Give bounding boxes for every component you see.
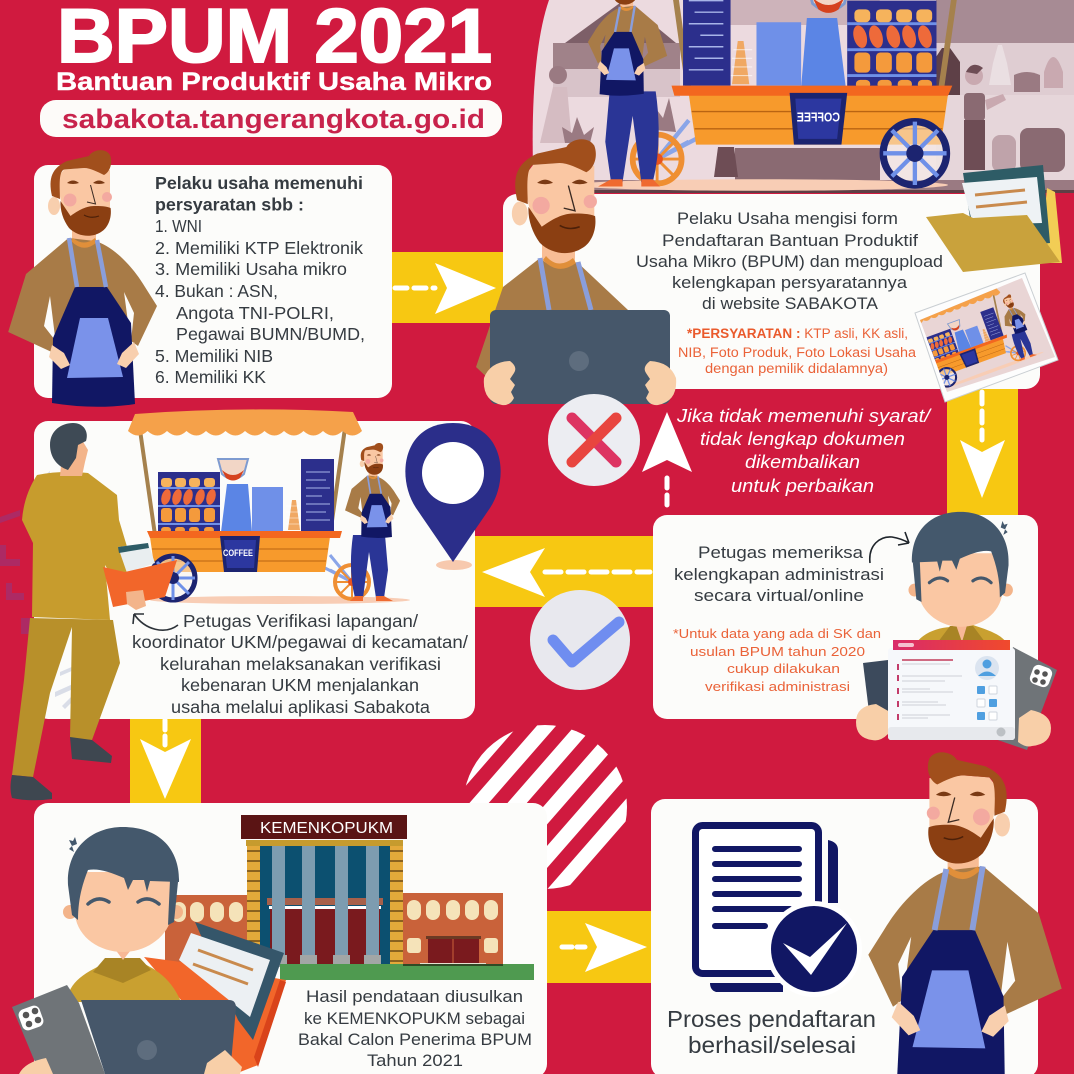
arrow bar: step 2 to 3 xyxy=(947,386,1018,516)
registration text: Pendaftaran Bantuan Produktif xyxy=(662,232,918,250)
panel: field verification xyxy=(34,409,475,719)
requirements note: dengan pemilik didalamnya) xyxy=(705,361,888,376)
verification text: koordinator UKM/pegawai di kecamatan/ xyxy=(132,632,468,652)
arrow bar: step 4 to 5 xyxy=(130,718,201,804)
check text: Petugas memeriksa xyxy=(698,543,864,562)
website pill xyxy=(40,100,502,137)
icon: approved xyxy=(530,590,630,690)
illustration: ministry building xyxy=(165,815,534,980)
requirements text: Pegawai BUMN/BUMD, xyxy=(176,324,365,344)
figure: officer with form xyxy=(856,512,1057,750)
figure: entrepreneur xyxy=(868,752,1062,1074)
icon: folder xyxy=(926,165,1062,272)
completion text: Proses pendaftaran xyxy=(667,1006,876,1032)
panel: eligibility requirements xyxy=(8,150,392,407)
figure: entrepreneur with laptop xyxy=(476,139,676,405)
requirements note: *PERSYARATAN : KTP asli, KK asli, xyxy=(687,326,908,341)
requirements note: NIB, Foto Produk, Foto Lokasi Usaha xyxy=(678,345,917,360)
arrow: curved to officer xyxy=(870,532,909,563)
note xyxy=(673,626,881,694)
note: usulan BPUM tahun 2020 xyxy=(690,644,865,659)
figure: entrepreneur xyxy=(8,150,157,407)
figure: field officer xyxy=(10,423,177,800)
panel: administrative check xyxy=(653,512,1057,750)
return note: tidak lengkap dokumen xyxy=(700,429,905,449)
return note: Jika tidak memenuhi syarat/ xyxy=(676,406,932,426)
requirements text: 5. Memiliki NIB xyxy=(155,346,273,366)
verification text: Petugas Verifikasi lapangan/ xyxy=(183,611,418,631)
proposal text: Bakal Calon Penerima BPUM xyxy=(298,1031,532,1049)
proposal text: Tahun 2021 xyxy=(367,1052,463,1070)
illustration: coffee cart: COFFEE xyxy=(223,548,253,558)
arrow: curved to officer xyxy=(133,614,178,630)
figure: officer with tablet xyxy=(12,827,286,1074)
note: verifikasi administrasi xyxy=(705,679,850,694)
registration text: di website SABAKOTA xyxy=(702,295,878,313)
requirements text: persyaratan sbb : xyxy=(155,194,304,214)
verification text: kebenaran UKM menjalankan xyxy=(181,675,419,695)
requirements text: 1. WNI xyxy=(155,216,202,236)
requirements text: 6. Memiliki KK xyxy=(155,367,266,387)
icon: location pin xyxy=(405,423,501,570)
registration text: Usaha Mikro (BPUM) dan mengupload xyxy=(636,253,943,271)
icon: rejected xyxy=(548,394,640,486)
requirements text xyxy=(155,173,365,387)
arrow bar: step 5 to 6 xyxy=(546,911,652,983)
market illustration xyxy=(530,0,1074,193)
decorative faint marks on left edge xyxy=(0,510,32,634)
check text: secara virtual/online xyxy=(694,586,864,605)
panel: proposal to ministry xyxy=(12,803,547,1074)
cart mirrored xyxy=(574,0,980,191)
illustration: ministry building: KEMENKOPUKM xyxy=(260,820,393,837)
return note: untuk perbaikan xyxy=(731,476,874,496)
arrow bar: step 1 to 2 xyxy=(392,252,504,323)
registration text: kelengkapan persyaratannya xyxy=(672,274,908,292)
note: *Untuk data yang ada di SK dan xyxy=(673,626,881,641)
requirements text: 4. Bukan : ASN, xyxy=(155,281,278,301)
verification text: usaha melalui aplikasi Sabakota xyxy=(171,697,430,717)
registration text: Pelaku Usaha mengisi form xyxy=(677,210,898,228)
verification text: kelurahan melaksanakan verifikasi xyxy=(160,654,441,674)
arrow: back up xyxy=(642,412,692,510)
completion text: berhasil/selesai xyxy=(688,1032,856,1058)
photo of business xyxy=(905,270,1060,402)
striped circle decoration xyxy=(466,725,627,889)
verification text xyxy=(132,611,468,717)
panel: registration complete xyxy=(651,752,1062,1074)
arrow bar: step 3 to 4 xyxy=(474,536,654,607)
requirements note xyxy=(678,326,917,376)
illustration: coffee cart xyxy=(128,409,410,604)
check text xyxy=(674,543,884,605)
return note: dikembalikan xyxy=(745,452,860,472)
return note xyxy=(676,406,932,496)
note: cukup dilakukan xyxy=(727,661,840,676)
cart mirrored: COFFEE xyxy=(797,110,840,125)
website pill: sabakota.tangerangkota.go.id xyxy=(62,104,485,134)
faint marks xyxy=(36,471,77,709)
requirements text: 3. Memiliki Usaha mikro xyxy=(155,259,347,279)
requirements text: Angota TNI-POLRI, xyxy=(176,303,334,323)
proposal text: Hasil pendataan diusulkan xyxy=(306,988,523,1006)
requirements text: Pelaku usaha memenuhi xyxy=(155,173,363,193)
subtitle: Bantuan Produktif Usaha Mikro xyxy=(56,68,492,96)
registration text xyxy=(636,210,943,313)
check text: kelengkapan administrasi xyxy=(674,565,884,584)
panel: online registration xyxy=(476,139,1062,405)
icon: documents with check xyxy=(696,826,862,997)
completion text xyxy=(667,1006,876,1058)
proposal text: ke KEMENKOPUKM sebagai xyxy=(304,1010,525,1028)
proposal text xyxy=(298,988,532,1070)
requirements text: 2. Memiliki KTP Elektronik xyxy=(155,238,363,258)
